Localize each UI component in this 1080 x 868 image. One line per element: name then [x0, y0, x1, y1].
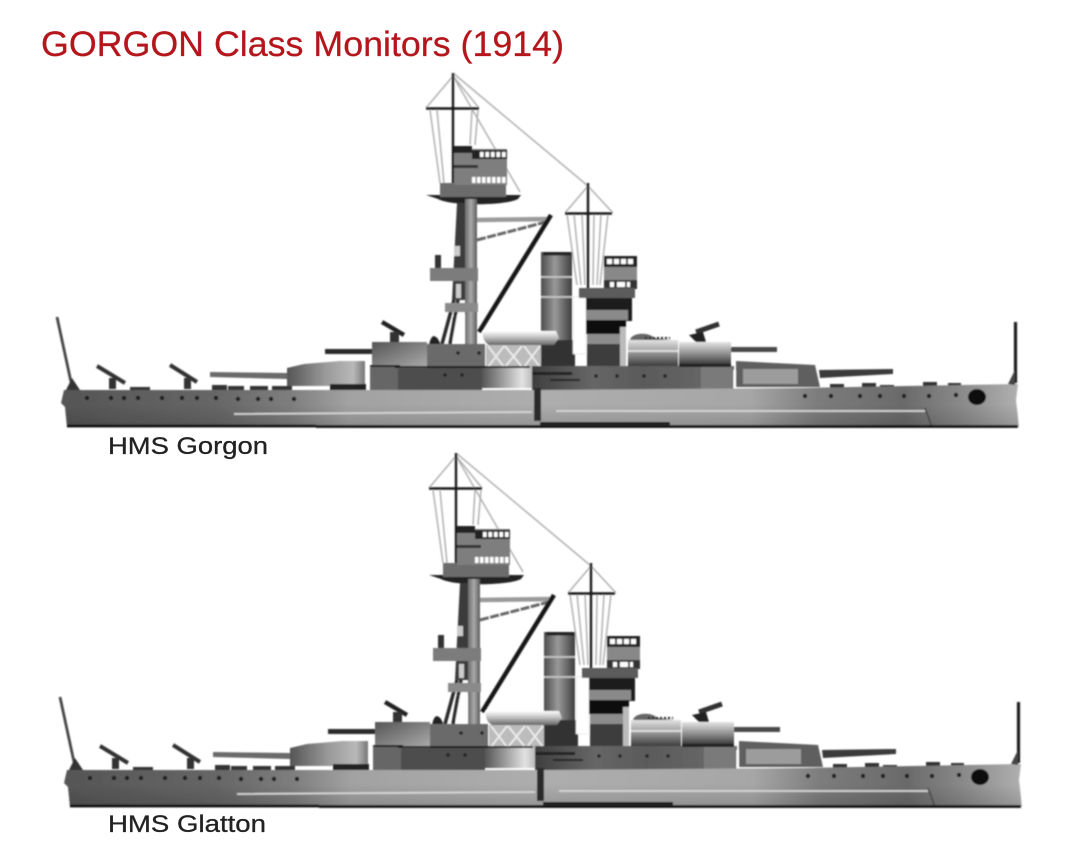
title: GORGON Class Monitors (1914): [41, 25, 564, 64]
label: HMS Gorgon: HMS Gorgon: [108, 433, 268, 460]
illustration: HMS Glatton side profile: [60, 453, 1022, 807]
label: HMS Glatton: HMS Glatton: [108, 811, 266, 838]
illustration: HMS Gorgon side profile: [57, 73, 1019, 427]
